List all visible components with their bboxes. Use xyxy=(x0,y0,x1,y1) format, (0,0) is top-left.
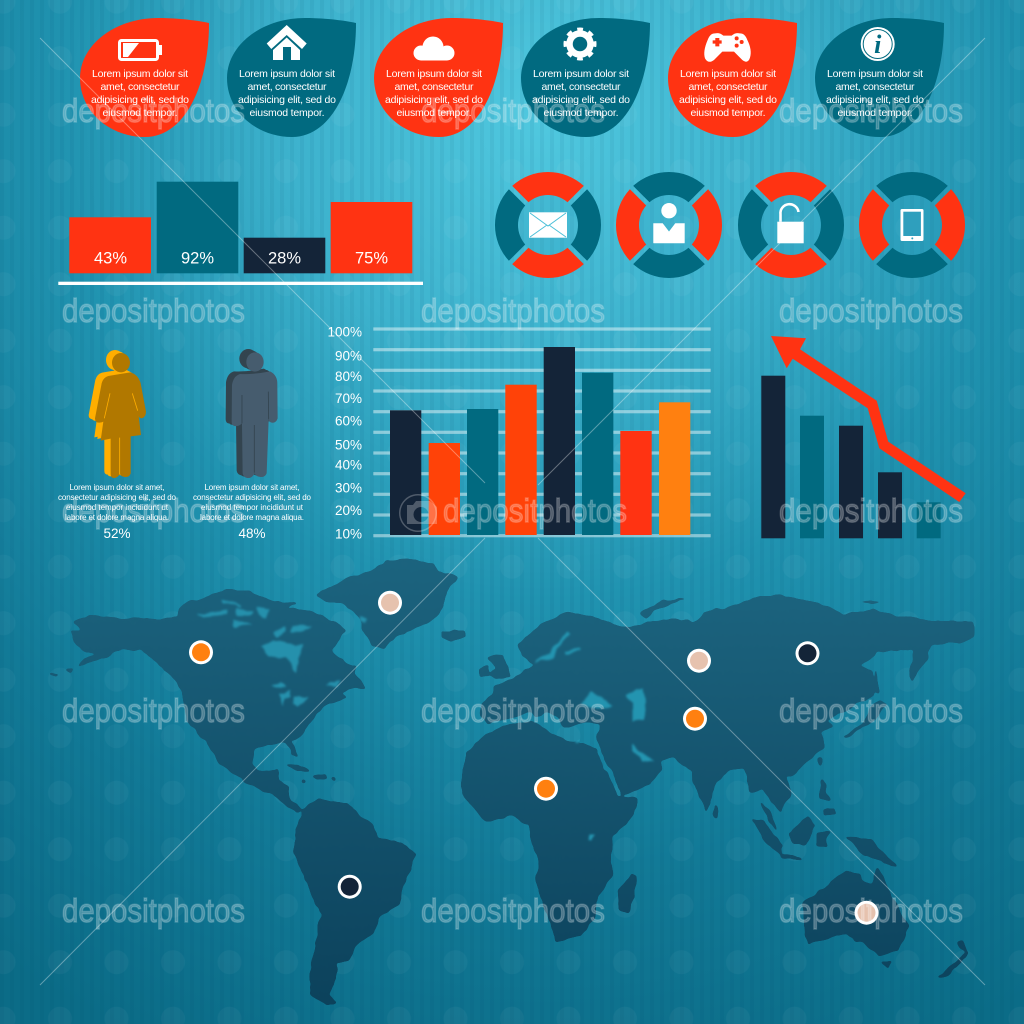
bar values: 43% xyxy=(94,250,127,268)
card text: amet, consectetur xyxy=(394,81,474,93)
y axis labels: 50% xyxy=(335,438,362,453)
card text: eiusmod tempor. xyxy=(250,107,324,119)
card text: adipisicing elit, sed do xyxy=(826,94,924,106)
lifebuoy icons row xyxy=(495,172,965,278)
map marker: russia east xyxy=(796,641,820,665)
y axis labels: 30% xyxy=(335,480,362,495)
lifebuoy: lock xyxy=(738,172,844,278)
card text: amet, consectetur xyxy=(542,81,621,93)
y axis labels: 70% xyxy=(335,391,362,406)
card text: adipisicing elit, sed do xyxy=(238,94,336,106)
card text xyxy=(385,68,483,119)
text: man caption: labore et dolore magna aliqua. xyxy=(200,513,304,522)
depositphotos watermarks: depositphotos xyxy=(421,92,605,129)
card text: Lorem ipsum dolor sit xyxy=(92,68,188,80)
bar values: 75% xyxy=(355,250,388,268)
card: home xyxy=(227,18,356,137)
card text: Lorem ipsum dolor sit xyxy=(386,68,482,80)
y axis labels: 90% xyxy=(335,348,362,364)
card text: eiusmod tempor. xyxy=(102,107,178,119)
bar values: 92% xyxy=(181,250,214,268)
card text: adipisicing elit, sed do xyxy=(679,94,777,106)
y axis labels: 20% xyxy=(335,503,362,518)
depositphotos watermarks: depositphotos xyxy=(779,892,963,929)
card text: eiusmod tempor. xyxy=(690,107,766,119)
card: games xyxy=(668,18,797,137)
text: man caption xyxy=(193,483,312,522)
gender statistics xyxy=(58,349,312,541)
columns xyxy=(390,347,690,535)
card text: amet, consectetur xyxy=(688,81,768,93)
depositphotos watermarks: depositphotos xyxy=(62,892,245,929)
card text: eiusmod tempor. xyxy=(838,107,912,119)
icon: gear xyxy=(566,30,594,58)
card text: Lorem ipsum dolor sit xyxy=(533,68,629,80)
chart gridlines xyxy=(373,327,711,537)
world map xyxy=(50,560,973,1005)
card text: eiusmod tempor. xyxy=(544,107,618,119)
icon: envelope xyxy=(529,212,567,238)
card: battery xyxy=(80,18,209,137)
map marker: russia west xyxy=(687,649,711,673)
depositphotos watermarks xyxy=(62,92,963,929)
card: info xyxy=(815,18,944,137)
row of teardrop info cards xyxy=(80,18,944,137)
card text xyxy=(91,68,189,119)
card text xyxy=(532,68,630,119)
depositphotos watermarks: depositphotos xyxy=(779,92,963,129)
y axis labels xyxy=(327,324,362,541)
card text: adipisicing elit, sed do xyxy=(385,94,483,106)
y axis labels: 40% xyxy=(335,458,362,473)
text: woman caption: eiusmod tempor incididunt ut xyxy=(66,503,169,512)
figure: man xyxy=(226,349,278,478)
depositphotos watermarks: depositphotos xyxy=(421,892,605,929)
declining bars xyxy=(761,376,941,538)
icon: battery xyxy=(120,40,162,60)
depositphotos watermarks: depositphotos xyxy=(421,692,605,729)
text: woman caption xyxy=(58,483,177,522)
card text: amet, consectetur xyxy=(248,81,327,93)
declining bar chart with arrow xyxy=(761,336,966,538)
card text: adipisicing elit, sed do xyxy=(532,94,630,106)
depositphotos watermarks: depositphotos xyxy=(443,492,627,529)
text: woman caption: labore et dolore magna aliqua. xyxy=(65,513,169,522)
figure: woman xyxy=(89,350,146,478)
lifebuoy: mail xyxy=(495,172,601,278)
value: 48%: 48% xyxy=(238,526,266,541)
y axis labels: 60% xyxy=(335,414,362,429)
value: 52%: 52% xyxy=(103,526,131,541)
bar values xyxy=(94,250,388,268)
lifebuoy: tablet xyxy=(859,172,965,278)
card text: Lorem ipsum dolor sit xyxy=(680,68,776,80)
y axis labels: 10% xyxy=(335,526,362,541)
card text: amet, consectetur xyxy=(100,81,180,93)
card text xyxy=(238,68,336,119)
card: cloud xyxy=(374,18,503,137)
icon: house xyxy=(267,25,307,60)
card text: Lorem ipsum dolor sit xyxy=(239,68,335,80)
depositphotos watermarks: depositphotos xyxy=(779,692,963,729)
text: woman caption: Lorem ipsum dolor sit amet, xyxy=(70,483,164,492)
icon: gamepad xyxy=(704,33,751,62)
watermark camera icon xyxy=(399,494,437,532)
text: woman caption: consectetur adipisicing elit, sed do xyxy=(58,493,177,502)
arrow xyxy=(771,336,966,502)
icon: person xyxy=(653,203,685,243)
depositphotos watermarks: depositphotos xyxy=(779,292,963,329)
y axis labels: 80% xyxy=(335,369,362,384)
continents xyxy=(50,560,973,1005)
percentage bar chart xyxy=(58,182,423,285)
main column chart xyxy=(327,324,711,541)
map marker: central asia xyxy=(683,707,707,731)
card text: amet, consectetur xyxy=(836,81,915,93)
depositphotos watermarks: depositphotos xyxy=(62,692,245,729)
icon: open padlock xyxy=(777,204,804,243)
map marker: greenland xyxy=(378,591,402,615)
depositphotos watermarks: depositphotos xyxy=(62,492,245,529)
bar values: 28% xyxy=(268,250,301,268)
depositphotos watermarks: depositphotos xyxy=(62,92,245,129)
icon: tablet xyxy=(900,209,924,241)
depositphotos watermarks: depositphotos xyxy=(421,292,605,329)
text: man caption: eiusmod tempor incididunt ut xyxy=(201,503,304,512)
depositphotos watermarks: depositphotos xyxy=(62,292,245,329)
card text: adipisicing elit, sed do xyxy=(91,94,189,106)
lifebuoy: person xyxy=(616,172,722,278)
y axis labels: 100% xyxy=(327,324,362,340)
card: settings xyxy=(521,18,650,137)
icon: cloud xyxy=(414,36,454,60)
depositphotos watermarks: depositphotos xyxy=(779,492,963,529)
card text: eiusmod tempor. xyxy=(396,107,472,119)
map marker: south america xyxy=(338,875,362,899)
map marker: north america xyxy=(189,640,213,664)
icon: info: i xyxy=(874,30,882,59)
map marker: australia xyxy=(854,901,878,925)
card text xyxy=(679,68,777,119)
text: man caption: consectetur adipisicing elit, sed do xyxy=(193,493,312,502)
card text: Lorem ipsum dolor sit xyxy=(827,68,923,80)
card text xyxy=(826,68,924,119)
text: man caption: Lorem ipsum dolor sit amet, xyxy=(204,483,300,492)
map marker: africa xyxy=(534,777,558,801)
